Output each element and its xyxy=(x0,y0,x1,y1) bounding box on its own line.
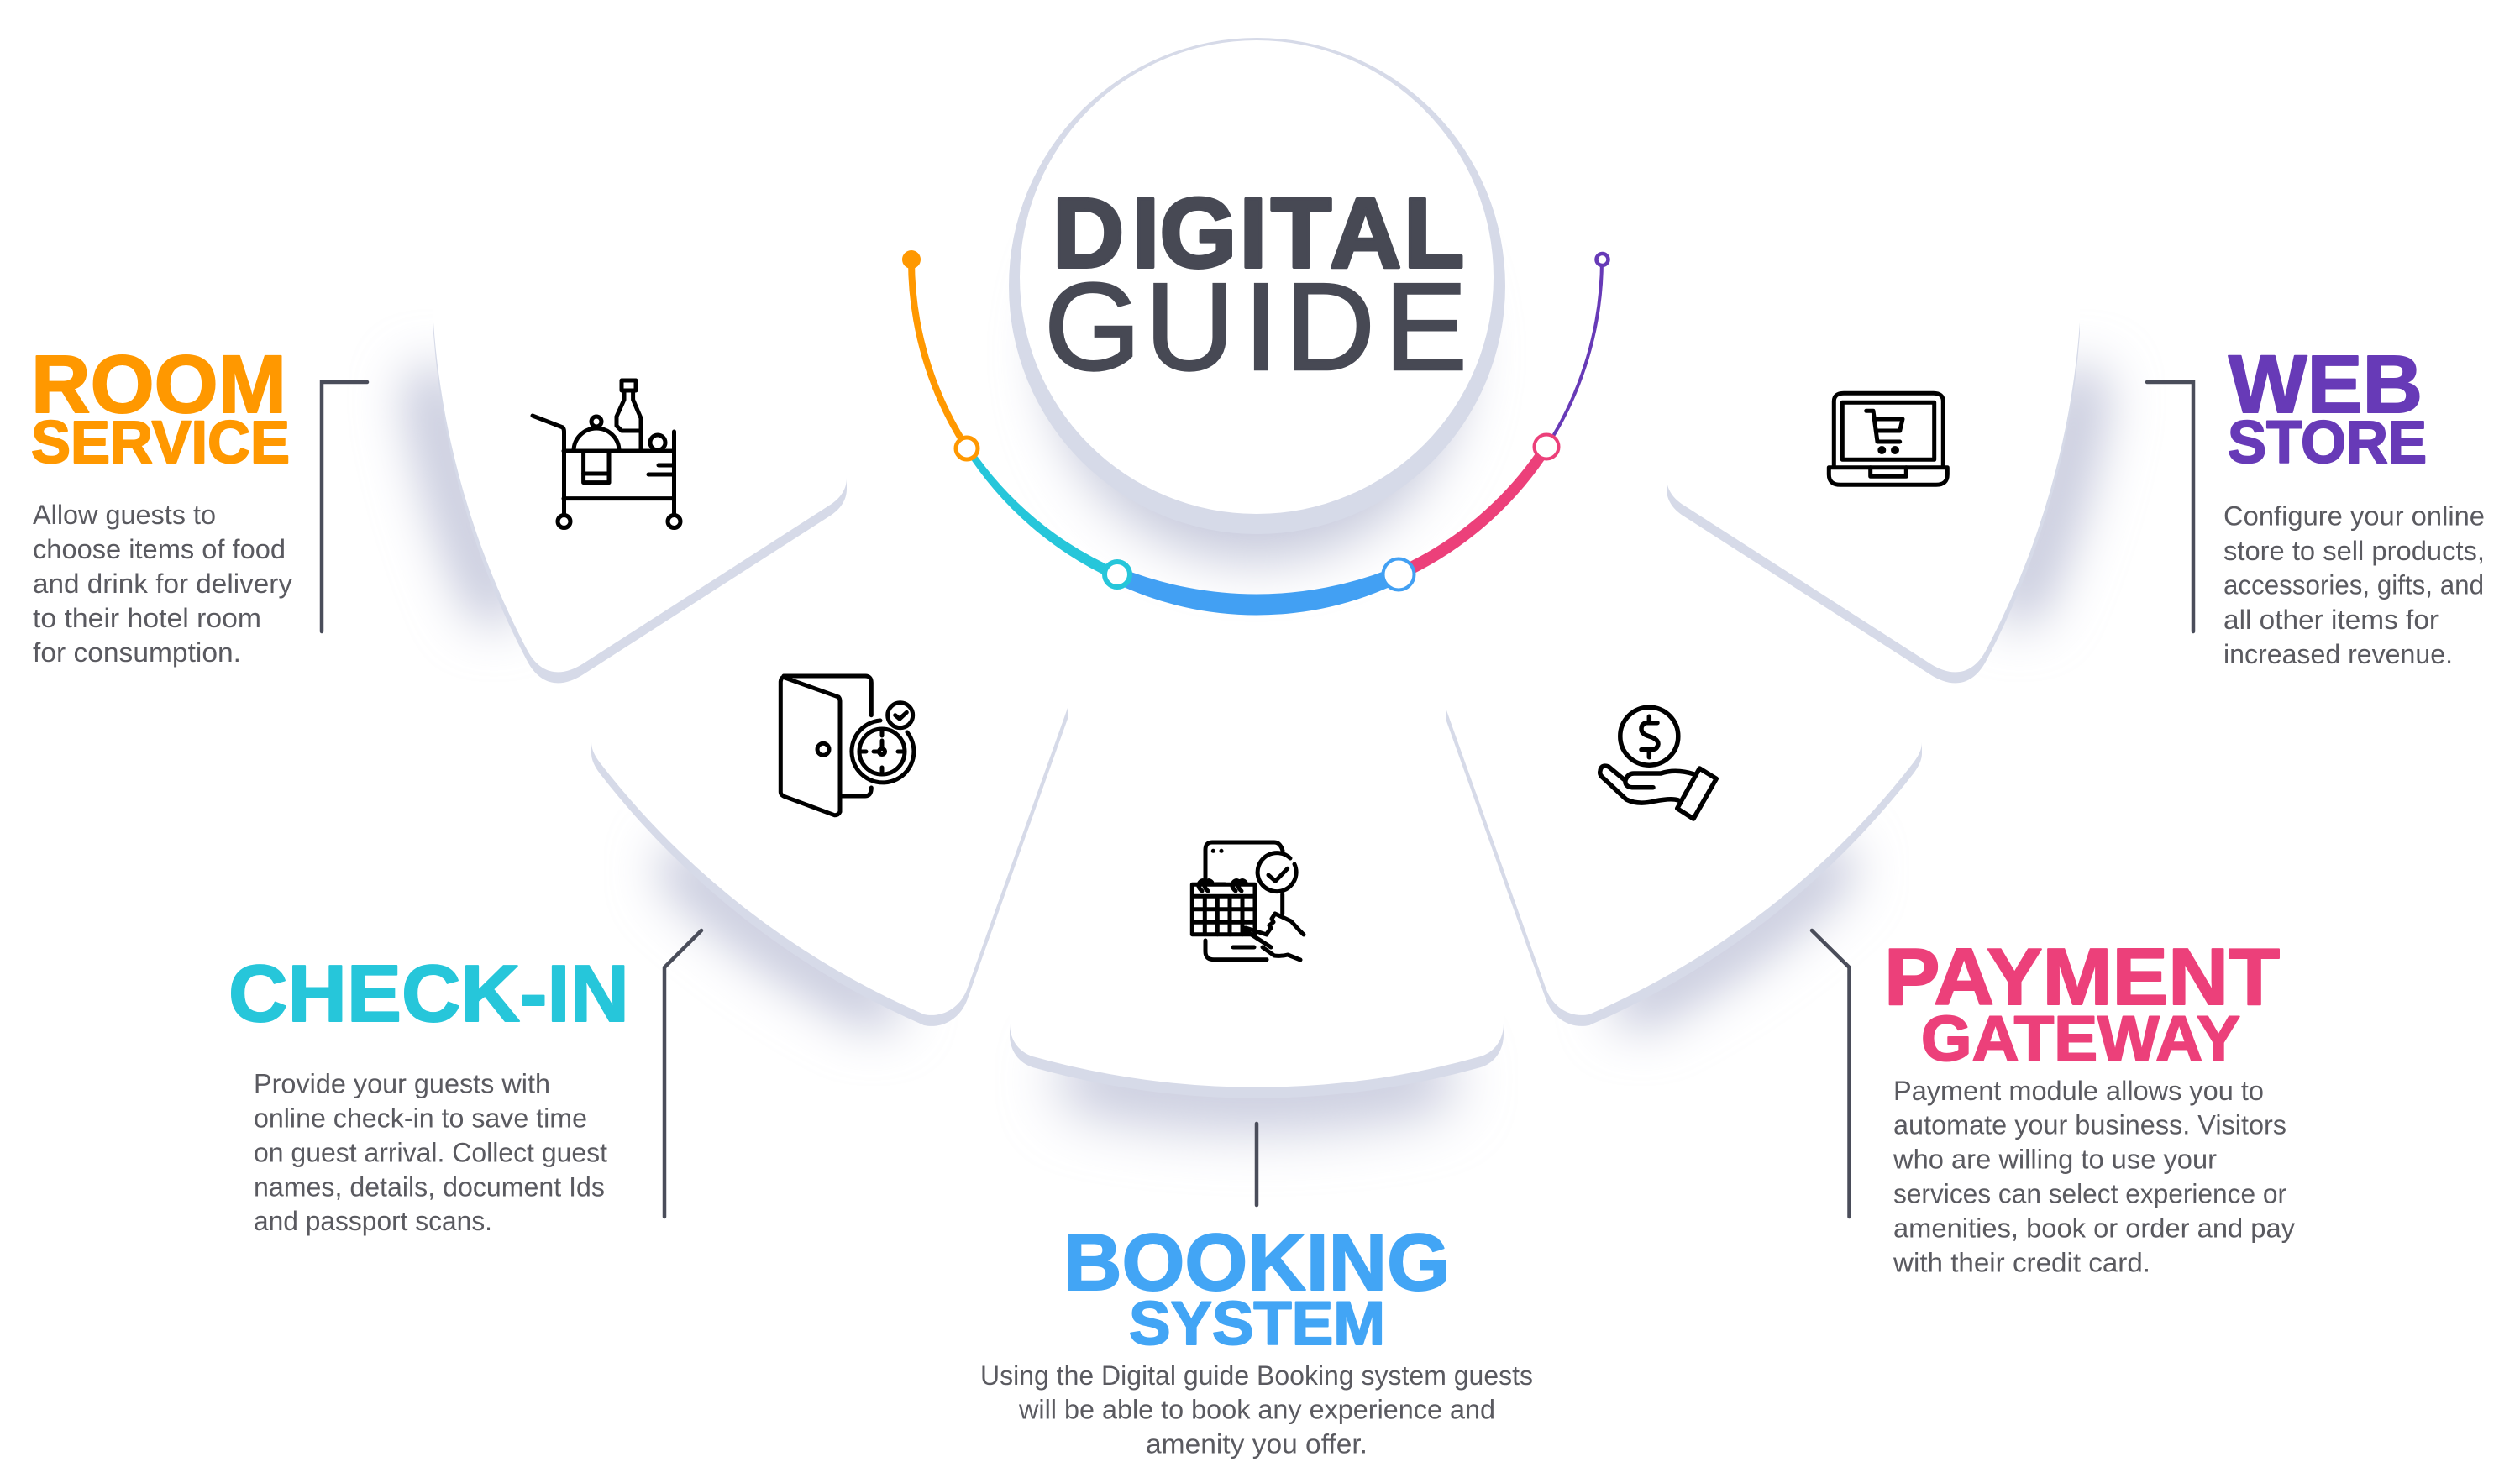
panel: payment gateway xyxy=(1446,697,2295,1277)
text: payment gateway description: with their credit card. xyxy=(1893,1247,2150,1277)
icon: coin in hand xyxy=(1600,707,1716,819)
text: web store description: accessories, gifts, and xyxy=(2223,570,2484,600)
main title: GUIDE xyxy=(1044,258,1467,396)
heading: payment gateway: PAYMENT xyxy=(1884,932,2280,1022)
text: check-in description: on guest arrival. Collect guest xyxy=(254,1137,607,1167)
heading: booking system: SYSTEM xyxy=(1129,1290,1385,1358)
connector: check-in xyxy=(664,930,701,1217)
heading: booking system: BOOKING xyxy=(1063,1218,1450,1307)
text: check-in description xyxy=(254,1069,607,1236)
heading: payment gateway xyxy=(1884,932,2280,1075)
icon: booking calendar xyxy=(1192,842,1304,960)
arc segment: orange xyxy=(911,259,968,448)
text: room service description: Allow guests to xyxy=(33,500,216,530)
text: web store description: all other items for xyxy=(2223,605,2439,635)
heading: web store xyxy=(2228,338,2427,476)
node: orange end xyxy=(902,250,921,269)
heading: room service: SERVICE xyxy=(31,410,290,476)
heading: web store: STORE xyxy=(2228,410,2427,476)
text: booking system description: amenity you offer. xyxy=(1146,1429,1368,1459)
heading: room service: ROOM xyxy=(31,338,286,430)
text: booking system description: Using the Digital guide Booking system guests xyxy=(980,1360,1533,1391)
text: booking system description: will be able to book any experience and xyxy=(1018,1394,1495,1424)
circle: inner disc xyxy=(1020,40,1494,514)
heading: web store: WEB xyxy=(2229,338,2423,430)
text: room service description: for consumption. xyxy=(33,637,241,668)
text: room service description xyxy=(33,500,292,668)
text: web store description xyxy=(2223,500,2485,669)
heading: check-in: CHECK-IN xyxy=(228,949,629,1039)
connector: payment gateway xyxy=(1812,930,1850,1217)
node: purple end xyxy=(1596,254,1608,265)
heading: room service xyxy=(31,338,290,476)
text: payment gateway description xyxy=(1893,1076,2295,1277)
icon: door with clock xyxy=(780,676,914,815)
icon: laptop with cart xyxy=(1829,393,1947,485)
panel: check-in xyxy=(228,676,1068,1236)
text: payment gateway description: who are willing to use your xyxy=(1893,1145,2217,1175)
node: blue xyxy=(1383,559,1415,590)
text: payment gateway description: amenities, book or order and pay xyxy=(1893,1213,2295,1243)
panel: booking system xyxy=(980,842,1533,1459)
text: room service description: to their hotel room xyxy=(33,603,261,633)
text: check-in description: Provide your guests with xyxy=(254,1069,550,1099)
text: room service description: and drink for delivery xyxy=(33,569,292,599)
heading: booking system xyxy=(1063,1218,1450,1358)
text: check-in description: online check-in to save time xyxy=(254,1103,587,1134)
main title: DIGITAL xyxy=(1053,178,1464,289)
circle: outer ring xyxy=(1009,38,1505,534)
text: web store description: Configure your online xyxy=(2223,500,2485,531)
connector: room service xyxy=(322,382,367,631)
text: check-in description: names, details, document Ids xyxy=(254,1171,605,1202)
arc segment: purple xyxy=(1546,259,1602,448)
arc segment: cyan xyxy=(964,446,1119,580)
text: web store description: increased revenue. xyxy=(2223,639,2453,669)
text: payment gateway description: Payment module allows you to xyxy=(1893,1076,2264,1106)
text: web store description: store to sell products, xyxy=(2223,536,2485,566)
text: booking system description xyxy=(980,1360,1533,1459)
text: payment gateway description: services can select experience or xyxy=(1893,1179,2286,1209)
connector: web store xyxy=(2147,382,2193,631)
text: payment gateway description: automate your business. Visitors xyxy=(1893,1110,2286,1140)
text: room service description: choose items of food xyxy=(33,534,286,564)
icon: room service trolley xyxy=(533,380,680,527)
node: orange xyxy=(956,438,978,459)
node: cyan xyxy=(1105,562,1130,587)
central hub xyxy=(902,38,1608,615)
connector: booking system xyxy=(1255,1124,1258,1205)
node: pink xyxy=(1534,435,1559,459)
heading: payment gateway: GATEWAY xyxy=(1921,1004,2240,1075)
arc segment: pink xyxy=(1394,444,1551,581)
panel: room service xyxy=(31,252,847,683)
main title xyxy=(1044,178,1467,396)
arc segment: blue xyxy=(1114,568,1399,615)
text: check-in description: and passport scans. xyxy=(254,1206,492,1236)
panel: web store xyxy=(1667,252,2485,683)
